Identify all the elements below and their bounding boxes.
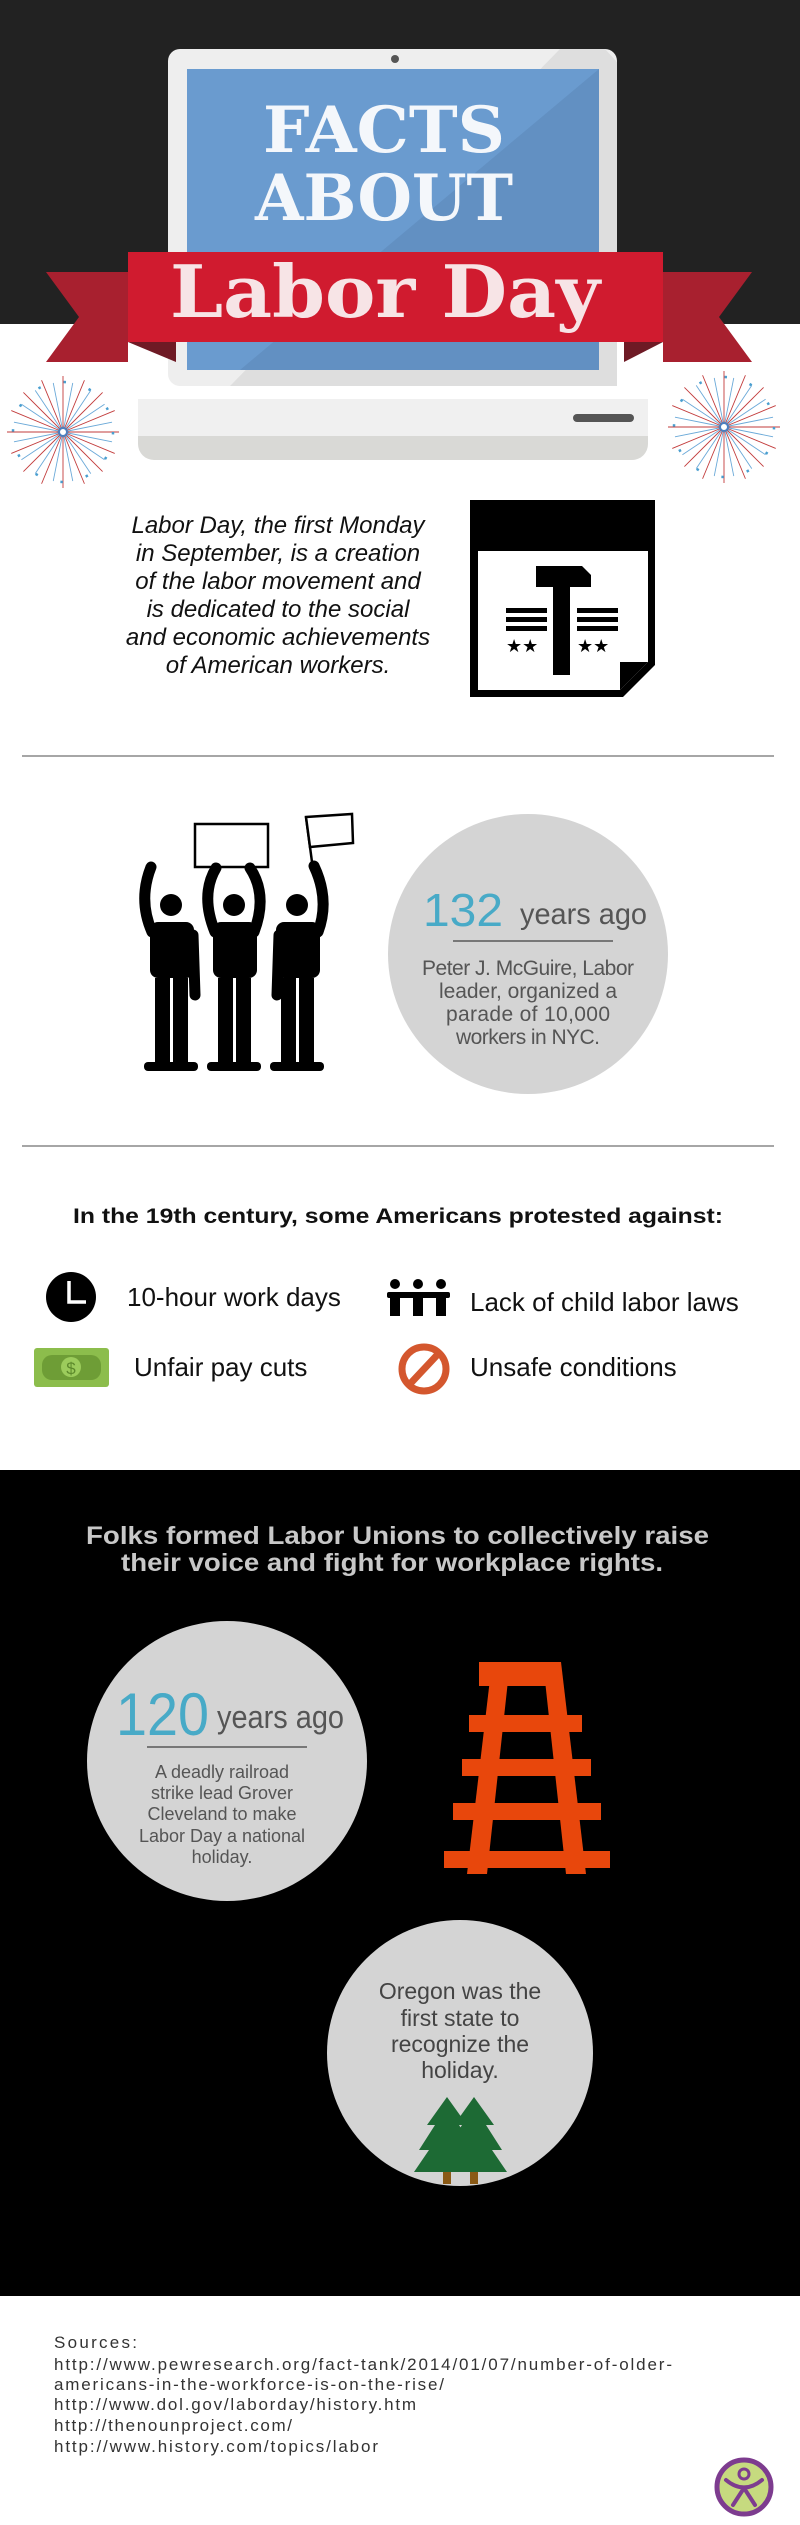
ribbon — [46, 252, 752, 362]
sources — [54, 2333, 672, 2456]
circle: 120 years ago: holiday. — [192, 1847, 252, 1867]
circle: 132 years ago — [388, 814, 668, 1094]
laptop — [138, 49, 648, 460]
circle: 132 years ago: years ago — [520, 898, 647, 931]
circle: Oregon — [327, 1920, 593, 2186]
circle: 120 years ago: strike lead Grover — [151, 1783, 293, 1803]
icon: calendar with hammer: ★★ — [577, 636, 609, 657]
sources: http://www.pewresearch.org/fact-tank/2014/01/07/number-of-older- — [54, 2355, 672, 2374]
title: FACTS — [263, 93, 505, 168]
text: child labor: Lack of child labor laws — [470, 1287, 739, 1317]
circle: 120 years ago — [87, 1621, 367, 1901]
sources: Sources: — [54, 2333, 137, 2352]
intro paragraph: and economic achievements — [126, 624, 430, 651]
circle: Oregon: recognize the — [391, 2031, 529, 2057]
icon: money: $ — [66, 1359, 76, 1378]
icon: calendar with hammer: ★★ — [506, 636, 538, 657]
icon: prohibited — [402, 1347, 446, 1391]
heading: protested against: In the 19th century, some Americans protested against: — [73, 1205, 723, 1228]
title: Labor Day — [170, 249, 602, 334]
circle: 120 years ago: years ago — [217, 1699, 344, 1735]
circle: 132 years ago: leader, organized a — [439, 980, 617, 1003]
heading: unions: Folks formed Labor Unions to collectively raise — [86, 1522, 709, 1550]
sources: http://www.dol.gov/laborday/history.htm — [54, 2395, 416, 2414]
circle: 120 years ago: Cleveland to make — [147, 1804, 297, 1824]
title: ABOUT — [254, 161, 513, 236]
circle: 132 years ago: workers in NYC. — [455, 1026, 600, 1049]
icon: calendar with hammer — [470, 500, 655, 697]
icon: children — [387, 1279, 450, 1316]
header dark band — [0, 0, 800, 324]
circle: 132 years ago: parade of 10,000 — [446, 1003, 610, 1026]
circle: 132 years ago: 132 — [423, 884, 503, 936]
circle: Oregon: holiday. — [421, 2057, 499, 2083]
intro paragraph: in September, is a creation — [136, 540, 420, 567]
circle: Oregon: Oregon was the — [379, 1978, 541, 2004]
sources: americans-in-the-workforce-is-on-the-rise/ — [54, 2375, 444, 2394]
sources: http://www.history.com/topics/labor — [54, 2437, 378, 2456]
intro paragraph: of American workers. — [166, 652, 390, 679]
intro paragraph: is dedicated to the social — [147, 596, 410, 623]
circle: 132 years ago: Peter J. McGuire, Labor — [422, 957, 634, 980]
circle: 120 years ago: Labor Day a national — [139, 1826, 305, 1846]
heading: unions: their voice and fight for workplace rights. — [121, 1549, 663, 1577]
title — [170, 93, 602, 334]
firework left — [7, 376, 119, 488]
text: unsafe conditions: Unsafe conditions — [470, 1352, 677, 1382]
icon: clock — [46, 1272, 96, 1322]
text: pay cuts: Unfair pay cuts — [134, 1352, 307, 1382]
icon: money — [34, 1348, 109, 1387]
intro paragraph: Labor Day, the first Monday — [131, 512, 427, 539]
intro paragraph: of the labor movement and — [135, 568, 421, 595]
firework right — [668, 371, 780, 483]
sources: http://thenounproject.com/ — [54, 2416, 292, 2435]
heading: unions — [86, 1522, 709, 1577]
text: 10-hour work days: 10-hour work days — [127, 1282, 341, 1312]
icon: protesters — [144, 814, 353, 1071]
logo — [717, 2460, 771, 2514]
circle: 120 years ago: A deadly railroad — [155, 1762, 289, 1782]
circle: 120 years ago: 120 — [116, 1681, 209, 1748]
intro paragraph — [126, 512, 430, 679]
icon: railroad — [444, 1662, 610, 1874]
icon: trees — [414, 2097, 507, 2184]
panel: labor unions — [0, 1470, 800, 2296]
circle: Oregon: first state to — [401, 2005, 519, 2031]
